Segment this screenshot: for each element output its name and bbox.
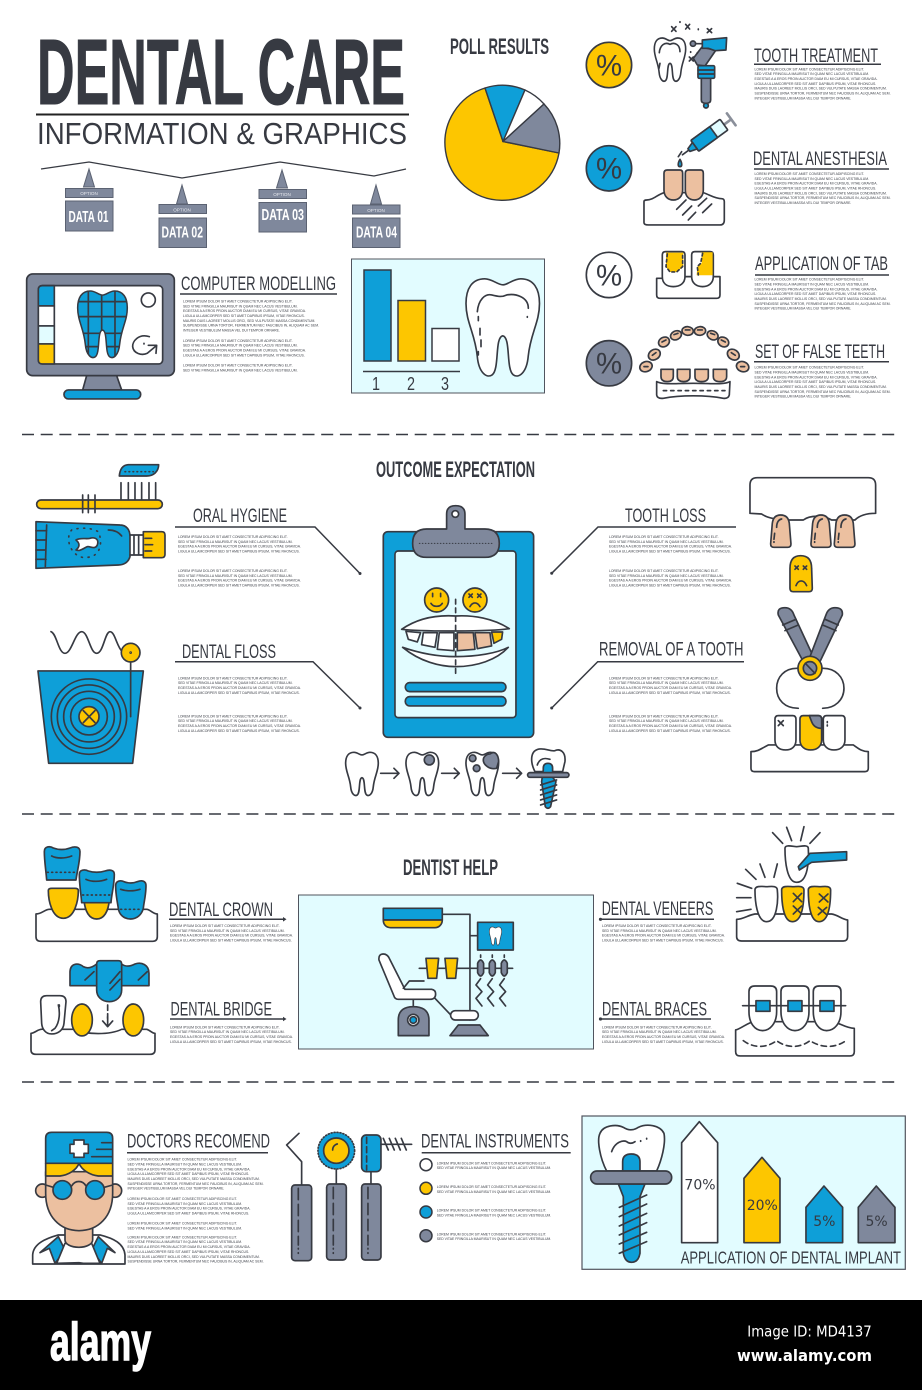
text block: oral hygiene: LIGULA ULLAMCORPER SED SIT AMET DAPIBUS IPSUM, VITAE RHONCUS. <box>178 549 300 554</box>
text block: dental veneers: LIGULA ULLAMCORPER SED SIT AMET DAPIBUS IPSUM, VITAE RHONCUS. <box>602 938 724 943</box>
data tag 01: DATA 01 <box>68 209 109 226</box>
text block: dental floss: LOREM IPSUM DOLOR SIT AMET CONSECTETUR ADIPISCING ELIT. <box>178 714 288 718</box>
title: DENTAL CARE <box>37 20 405 124</box>
text block: doctors recomend: EGESTAS A A EROS PROIN AUCTOR DIAM EU MI CURSUS, VITAE GRAVIDA. <box>128 1245 250 1249</box>
text block: dental crown: LOREM IPSUM DOLOR SIT AMET CONSECTETUR ADIPISCING ELIT. <box>170 924 280 928</box>
text block: computer modelling: LOREM IPSUM DOLOR SIT AMET CONSECTETUR ADIPISCING ELIT. <box>183 299 293 304</box>
subtitle: INFORMATION & GRAPHICS <box>37 116 407 151</box>
data tag 04: OPTION <box>367 208 385 213</box>
bullet list: dental instruments: LOREM IPSUM DOLOR SIT AMET CONSECTETUR ADIPISCING ELIT. <box>437 1208 546 1213</box>
heading: dental crown <box>169 899 293 943</box>
text block: set of false teeth: INTEGER VESTIBULUM MASSA VEL DUI TEMPOR ORNARE. <box>754 395 851 399</box>
text block: computer modelling <box>183 299 319 372</box>
heading: set of false teeth <box>754 341 891 399</box>
panel: dentist chair and equipment <box>298 895 594 1049</box>
text block: removal of a tooth: SED VITAE FRINGILLA MAURISUT IN QUAM NEC LACUS VESTIBULUM. <box>609 681 724 685</box>
heading: dental veneers: DENTAL VENEERS <box>602 898 713 920</box>
icon: set of false teeth <box>638 326 750 398</box>
text block: dental braces: LIGULA ULLAMCORPER SED SIT AMET DAPIBUS IPSUM, VITAE RHONCUS. <box>602 1040 724 1044</box>
icon: dental braces <box>736 986 854 1056</box>
pie chart <box>445 85 560 200</box>
bullet list: dental instruments: SED VITAE FRINGILLA MAURISUT IN QUAM NEC LACUS VESTIBULUM. <box>437 1190 551 1194</box>
text block: application of tab: EGESTAS A A EROS PROIN AUCTOR DIAM EU MI CURSUS, VITAE GRAVIDA. <box>754 287 877 291</box>
text block: application of tab: LIGULA ULLAMCORPER SED SIT AMET DAPIBUS IPSUM, VITAE RHONCUS. <box>754 292 876 296</box>
bar: 70 percent: 70% <box>684 1177 716 1193</box>
bullet list: dental instruments: SED VITAE FRINGILLA MAURISUT IN QUAM NEC LACUS VESTIBULUM. <box>437 1237 551 1241</box>
text block: doctors recomend: SED VITAE FRINGILLA MAURISUT IN QUAM NEC LACUS VESTIBULUM. <box>128 1226 242 1231</box>
heading: poll results: POLL RESULTS <box>450 34 549 59</box>
text block: dental crown: SED VITAE FRINGILLA MAURISUT IN QUAM NEC LACUS VESTIBULUM. <box>170 929 285 933</box>
icon: anesthesia syringe and teeth <box>644 113 736 225</box>
bar chart: 1 <box>372 373 380 394</box>
data timeline <box>41 162 406 248</box>
text block: computer modelling: INTEGER VESTIBULUM MASSA VEL DUI TEMPOR ORNARE. <box>183 328 280 333</box>
text block: dental veneers: LOREM IPSUM DOLOR SIT AMET CONSECTETUR ADIPISCING ELIT. <box>602 924 712 928</box>
percent circle badges: % <box>596 348 622 381</box>
text block: doctors recomend: MAURIS DUIS LAOREET MOLLIS ORCI, SED VULPUTATE MASSA CONDIMENTUM. <box>128 1177 260 1181</box>
heading: dentist help: DENTIST HELP <box>403 855 498 880</box>
heading: removal of a tooth: REMOVAL OF A TOOTH <box>599 639 744 661</box>
text block: removal of a tooth: LIGULA ULLAMCORPER SED SIT AMET DAPIBUS IPSUM, VITAE RHONCUS. <box>609 729 731 733</box>
text block: oral hygiene: EGESTAS A A EROS PROIN AUCTOR DIAM EU MI CURSUS, VITAE GRAVIDA. <box>178 545 301 549</box>
text block: tooth loss: LIGULA ULLAMCORPER SED SIT AMET DAPIBUS IPSUM, VITAE RHONCUS. <box>609 549 731 554</box>
text block: dental anesthesia: EGESTAS A A EROS PROIN AUCTOR DIAM EU MI CURSUS, VITAE GRAVIDA. <box>754 182 877 186</box>
text block: set of false teeth: MAURIS DUIS LAOREET MOLLIS ORCI, SED VULPUTATE MASSA CONDIMENTUM. <box>754 385 887 389</box>
panel: application of dental implant <box>582 1116 905 1269</box>
text block: removal of a tooth: LIGULA ULLAMCORPER SED SIT AMET DAPIBUS IPSUM, VITAE RHONCUS. <box>609 691 731 695</box>
text block: dental floss: SED VITAE FRINGILLA MAURISUT IN QUAM NEC LACUS VESTIBULUM. <box>178 719 293 723</box>
text block: dental floss: LIGULA ULLAMCORPER SED SIT AMET DAPIBUS IPSUM, VITAE RHONCUS. <box>178 729 300 733</box>
text block: set of false teeth: LIGULA ULLAMCORPER SED SIT AMET DAPIBUS IPSUM, VITAE RHONCUS. <box>754 380 876 384</box>
text block: computer modelling: SED VITAE FRINGILLA MAURISUT IN QUAM NEC LACUS VESTIBULUM. <box>183 304 298 308</box>
text block: dental floss: EGESTAS A A EROS PROIN AUCTOR DIAM EU MI CURSUS, VITAE GRAVIDA. <box>178 686 301 690</box>
text block: removal of a tooth: LOREM IPSUM DOLOR SIT AMET CONSECTETUR ADIPISCING ELIT. <box>609 714 719 718</box>
heading: oral hygiene: ORAL HYGIENE <box>193 505 287 527</box>
text block: oral hygiene: SED VITAE FRINGILLA MAURISUT IN QUAM NEC LACUS VESTIBULUM. <box>178 574 293 578</box>
text block: doctors recomend: INTEGER VESTIBULUM MASSA VEL DUI TEMPOR ORNARE. <box>128 1187 224 1191</box>
text block: tooth loss: EGESTAS A A EROS PROIN AUCTOR DIAM EU MI CURSUS, VITAE GRAVIDA. <box>609 545 732 549</box>
bar: 5 percent grey <box>858 1186 895 1243</box>
text block: doctors recomend: MAURIS DUIS LAOREET MOLLIS ORCI, SED VULPUTATE MASSA CONDIMENTUM. <box>128 1255 260 1259</box>
text block: doctors recomend: LIGULA ULLAMCORPER SED SIT AMET DAPIBUS IPSUM, VITAE RHONCUS. <box>128 1172 249 1176</box>
icon: computer monitor with tooth model <box>27 274 174 399</box>
text block: tooth treatment: LOREM IPSUM DOLOR SIT AMET CONSECTETUR ADIPISCING ELIT. <box>754 67 864 71</box>
text block: set of false teeth: LOREM IPSUM DOLOR SIT AMET CONSECTETUR ADIPISCING ELIT. <box>754 365 864 370</box>
text block: tooth treatment: SUSPENDISSE URNA TORTOR, FERMENTUM NEC FAUCIBUS IN, ALIQUAM AC SEM. <box>754 91 891 96</box>
icon: decayed tooth <box>466 752 499 795</box>
text block: dental bridge: LIGULA ULLAMCORPER SED SIT AMET DAPIBUS IPSUM, VITAE RHONCUS. <box>170 1040 292 1044</box>
bullet list: dental instruments: LOREM IPSUM DOLOR SIT AMET CONSECTETUR ADIPISCING ELIT. <box>437 1161 546 1165</box>
text block: set of false teeth: SED VITAE FRINGILLA MAURISUT IN QUAM NEC LACUS VESTIBULUM. <box>754 370 869 375</box>
text block: doctors recomend: LOREM IPSUM DOLOR SIT AMET CONSECTETUR ADIPISCING ELIT. <box>128 1235 237 1239</box>
heading: computer modelling <box>180 273 337 372</box>
text block: dental crown: EGESTAS A A EROS PROIN AUCTOR DIAM EU MI CURSUS, VITAE GRAVIDA. <box>170 934 293 938</box>
heading: dental veneers <box>599 898 725 943</box>
text block: oral hygiene: EGESTAS A A EROS PROIN AUCTOR DIAM EU MI CURSUS, VITAE GRAVIDA. <box>178 579 301 583</box>
text block: doctors recomend: LOREM IPSUM DOLOR SIT AMET CONSECTETUR ADIPISCING ELIT. <box>128 1197 237 1201</box>
icon: tooth loss <box>750 478 876 592</box>
text block: doctors recomend: LIGULA ULLAMCORPER SED SIT AMET DAPIBUS IPSUM, VITAE RHONCUS. <box>128 1211 249 1216</box>
text block: application of tab: SUSPENDISSE URNA TORTOR, FERMENTUM NEC FAUCIBUS IN, ALIQUAM AC SEM. <box>754 302 891 306</box>
text block: computer modelling: LOREM IPSUM DOLOR SIT AMET CONSECTETUR ADIPISCING ELIT. <box>183 339 293 343</box>
icon: implant <box>591 1125 672 1262</box>
text block: doctors recomend: SED VITAE FRINGILLA MAURISUT IN QUAM NEC LACUS VESTIBULUM. <box>128 1162 242 1167</box>
icon: tooth with cavity <box>406 752 439 795</box>
text block: dental floss: LIGULA ULLAMCORPER SED SIT AMET DAPIBUS IPSUM, VITAE RHONCUS. <box>178 691 300 695</box>
text block: dental crown: LIGULA ULLAMCORPER SED SIT AMET DAPIBUS IPSUM, VITAE RHONCUS. <box>170 938 292 943</box>
text block: dental bridge: SED VITAE FRINGILLA MAURISUT IN QUAM NEC LACUS VESTIBULUM. <box>170 1030 285 1034</box>
data tag 04: DATA 04 <box>356 224 397 242</box>
heading: dental bridge <box>170 999 293 1044</box>
icon: large tooth <box>466 279 539 376</box>
bar: 20 percent <box>744 1157 780 1243</box>
bullet list: dental instruments: LOREM IPSUM DOLOR SIT AMET CONSECTETUR ADIPISCING ELIT. <box>437 1185 546 1189</box>
arrow <box>503 768 522 778</box>
heading: dental braces: DENTAL BRACES <box>602 999 707 1021</box>
text block: dental anesthesia: SED VITAE FRINGILLA MAURISUT IN QUAM NEC LACUS VESTIBULUM. <box>754 177 869 181</box>
image id: Image ID: MD4137 <box>747 1322 872 1340</box>
heading: dental floss <box>175 641 362 733</box>
text block: application of tab: SED VITAE FRINGILLA MAURISUT IN QUAM NEC LACUS VESTIBULUM. <box>754 282 869 287</box>
heading: dental bridge: DENTAL BRIDGE <box>170 999 272 1021</box>
percent circle badges: % <box>596 259 622 292</box>
text block: dental braces: EGESTAS A A EROS PROIN AUCTOR DIAM EU MI CURSUS, VITAE GRAVIDA. <box>602 1035 725 1039</box>
text block: tooth treatment: SED VITAE FRINGILLA MAURISUT IN QUAM NEC LACUS VESTIBULUM. <box>754 72 869 76</box>
heading: dental crown: DENTAL CROWN <box>169 899 273 921</box>
data tag 02: DATA 02 <box>162 224 203 242</box>
text block: doctors recomend: LOREM IPSUM DOLOR SIT AMET CONSECTETUR ADIPISCING ELIT. <box>128 1221 237 1226</box>
text block: removal of a tooth: LOREM IPSUM DOLOR SIT AMET CONSECTETUR ADIPISCING ELIT. <box>609 676 719 680</box>
text block: computer modelling: SED VITAE FRINGILLA MAURISUT IN QUAM NEC LACUS VESTIBULUM. <box>183 368 298 372</box>
heading: application of tab <box>754 253 891 311</box>
text block: dental anesthesia: LIGULA ULLAMCORPER SED SIT AMET DAPIBUS IPSUM, VITAE RHONCUS. <box>754 186 876 191</box>
clipboard with smile comparison <box>383 506 534 737</box>
text block: tooth loss: LOREM IPSUM DOLOR SIT AMET CONSECTETUR ADIPISCING ELIT. <box>609 535 719 539</box>
icon: doctor <box>33 1132 125 1264</box>
text block: doctors recomend: EGESTAS A A EROS PROIN AUCTOR DIAM EU MI CURSUS, VITAE GRAVIDA. <box>128 1167 250 1171</box>
heading: tooth loss: TOOTH LOSS <box>625 505 706 527</box>
heading: doctors recomend <box>127 1131 270 1264</box>
text block: oral hygiene: LOREM IPSUM DOLOR SIT AMET CONSECTETUR ADIPISCING ELIT. <box>178 535 288 539</box>
text block: application of tab: LOREM IPSUM DOLOR SIT AMET CONSECTETUR ADIPISCING ELIT. <box>754 277 864 282</box>
arrow <box>381 768 399 778</box>
text block: doctors recomend: SED VITAE FRINGILLA MAURISUT IN QUAM NEC LACUS VESTIBULUM. <box>128 1240 242 1244</box>
heading: dental instruments: DENTAL INSTRUMENTS <box>421 1131 569 1153</box>
bar chart: 2 <box>407 373 415 394</box>
text block: dental anesthesia: INTEGER VESTIBULUM MASSA VEL DUI TEMPOR ORNARE. <box>754 201 851 205</box>
bar: 5 percent blue <box>806 1186 843 1243</box>
bar: 5 percent grey: 5% <box>866 1214 888 1230</box>
icon: dental veneers <box>737 827 848 941</box>
text block: computer modelling: EGESTAS A A EROS PROIN AUCTOR DIAM EU MI CURSUS, VITAE GRAVIDA. <box>183 309 306 313</box>
text block: removal of a tooth: EGESTAS A A EROS PROIN AUCTOR DIAM EU MI CURSUS, VITAE GRAVIDA. <box>609 686 732 690</box>
text block: oral hygiene: LIGULA ULLAMCORPER SED SIT AMET DAPIBUS IPSUM, VITAE RHONCUS. <box>178 583 300 588</box>
text block: dental veneers: SED VITAE FRINGILLA MAURISUT IN QUAM NEC LACUS VESTIBULUM. <box>602 929 717 933</box>
text block: tooth loss: SED VITAE FRINGILLA MAURISUT IN QUAM NEC LACUS VESTIBULUM. <box>609 540 724 544</box>
bar chart panel with tooth <box>352 259 544 394</box>
text block: dental braces: LOREM IPSUM DOLOR SIT AMET CONSECTETUR ADIPISCING ELIT. <box>602 1025 712 1029</box>
percent circle badges: % <box>596 153 622 186</box>
text block: tooth loss: LIGULA ULLAMCORPER SED SIT AMET DAPIBUS IPSUM, VITAE RHONCUS. <box>609 583 731 588</box>
icon: dental floss box <box>38 632 143 763</box>
tooth decay progression <box>346 749 569 808</box>
text block: computer modelling: EGESTAS A A EROS PROIN AUCTOR DIAM EU MI CURSUS, VITAE GRAVIDA. <box>183 348 306 353</box>
bullet list: dental instruments <box>420 1159 551 1242</box>
bullet list: dental instruments: SED VITAE FRINGILLA MAURISUT IN QUAM NEC LACUS VESTIBULUM. <box>437 1213 551 1218</box>
icon: tooth removal pliers <box>751 608 868 772</box>
text block: removal of a tooth: SED VITAE FRINGILLA MAURISUT IN QUAM NEC LACUS VESTIBULUM. <box>609 719 724 723</box>
text block: tooth loss: EGESTAS A A EROS PROIN AUCTOR DIAM EU MI CURSUS, VITAE GRAVIDA. <box>609 579 732 583</box>
data tag 01 <box>66 169 113 231</box>
text block: dental braces: SED VITAE FRINGILLA MAURISUT IN QUAM NEC LACUS VESTIBULUM. <box>602 1030 717 1034</box>
icon: application of tab <box>657 252 720 298</box>
text block: doctors recomend: LOREM IPSUM DOLOR SIT AMET CONSECTETUR ADIPISCING ELIT. <box>128 1157 237 1162</box>
text block: dental anesthesia: MAURIS DUIS LAOREET MOLLIS ORCI, SED VULPUTATE MASSA CONDIMENTUM. <box>754 191 887 195</box>
bullet list: dental instruments: LOREM IPSUM DOLOR SIT AMET CONSECTETUR ADIPISCING ELIT. <box>437 1232 546 1236</box>
heading: tooth treatment <box>754 45 891 100</box>
text block: dental anesthesia: LOREM IPSUM DOLOR SIT AMET CONSECTETUR ADIPISCING ELIT. <box>754 172 864 176</box>
text block: tooth treatment: LIGULA ULLAMCORPER SED SIT AMET DAPIBUS IPSUM, VITAE RHONCUS. <box>754 82 876 86</box>
heading: dental anesthesia <box>753 148 891 205</box>
icon: dental instruments <box>287 1132 412 1261</box>
text block: computer modelling: LOREM IPSUM DOLOR SIT AMET CONSECTETUR ADIPISCING ELIT. <box>183 363 293 368</box>
text block: computer modelling: MAURIS DUIS LAOREET MOLLIS ORCI, SED VULPUTATE MASSA CONDIMENTUM. <box>183 319 315 323</box>
text block: doctors recomend: EGESTAS A A EROS PROIN AUCTOR DIAM EU MI CURSUS, VITAE GRAVIDA. <box>128 1207 250 1211</box>
heading: tooth loss <box>550 505 736 588</box>
data tag 01: OPTION <box>80 191 98 196</box>
text block: computer modelling: LIGULA ULLAMCORPER SED SIT AMET DAPIBUS IPSUM, VITAE RHONCUS. <box>183 314 305 318</box>
heading: removal of a tooth <box>550 639 744 733</box>
heading: computer modelling: COMPUTER MODELLING <box>181 273 336 295</box>
text block: computer modelling: SED VITAE FRINGILLA MAURISUT IN QUAM NEC LACUS VESTIBULUM. <box>183 343 298 348</box>
text block: tooth loss: LOREM IPSUM DOLOR SIT AMET CONSECTETUR ADIPISCING ELIT. <box>609 569 719 573</box>
text block: computer modelling: SUSPENDISSE URNA TORTOR, FERMENTUM NEC FAUCIBUS IN, ALIQUAM AC SEM. <box>183 324 319 328</box>
text block: doctors recomend: SUSPENDISSE URNA TORTOR, FERMENTUM NEC FAUCIBUS IN, ALIQUAM AC SEM. <box>128 1259 264 1264</box>
bar chart: 3 <box>441 373 449 394</box>
bar: 20 percent: 20% <box>747 1198 778 1214</box>
text block: dental veneers: EGESTAS A A EROS PROIN AUCTOR DIAM EU MI CURSUS, VITAE GRAVIDA. <box>602 934 725 938</box>
text block: doctors recomend: SUSPENDISSE URNA TORTOR, FERMENTUM NEC FAUCIBUS IN, ALIQUAM AC SEM. <box>128 1182 264 1186</box>
data tag 02: OPTION <box>173 208 191 212</box>
text block: doctors recomend: SED VITAE FRINGILLA MAURISUT IN QUAM NEC LACUS VESTIBULUM. <box>128 1202 242 1206</box>
text block: dental floss: EGESTAS A A EROS PROIN AUCTOR DIAM EU MI CURSUS, VITAE GRAVIDA. <box>178 724 301 728</box>
heading: doctors recomend: DOCTORS RECOMEND <box>127 1131 270 1153</box>
text block: tooth treatment: INTEGER VESTIBULUM MASSA VEL DUI TEMPOR ORNARE. <box>754 96 851 100</box>
data tag 02 <box>159 185 206 248</box>
data tag 03: DATA 03 <box>262 207 304 224</box>
text block: oral hygiene: SED VITAE FRINGILLA MAURISUT IN QUAM NEC LACUS VESTIBULUM. <box>178 540 293 544</box>
icon: dentist chair <box>379 908 513 1036</box>
heading: dental instruments <box>420 1131 571 1242</box>
text block: dental floss: LOREM IPSUM DOLOR SIT AMET CONSECTETUR ADIPISCING ELIT. <box>178 676 288 680</box>
footer logo: alamy <box>50 1313 151 1372</box>
bar: 5 percent blue: 5% <box>813 1214 835 1230</box>
text block: dental floss: SED VITAE FRINGILLA MAURISUT IN QUAM NEC LACUS VESTIBULUM. <box>178 681 293 685</box>
data tag 03 <box>259 170 306 232</box>
icon: dental crown <box>36 847 157 941</box>
text block: tooth treatment: EGESTAS A A EROS PROIN AUCTOR DIAM EU MI CURSUS, VITAE GRAVIDA. <box>754 77 877 81</box>
footer bar <box>0 1300 922 1390</box>
text block: removal of a tooth: EGESTAS A A EROS PROIN AUCTOR DIAM EU MI CURSUS, VITAE GRAVIDA. <box>609 724 732 728</box>
text block: set of false teeth: EGESTAS A A EROS PROIN AUCTOR DIAM EU MI CURSUS, VITAE GRAVIDA. <box>754 375 877 379</box>
text block: computer modelling: LIGULA ULLAMCORPER SED SIT AMET DAPIBUS IPSUM, VITAE RHONCUS. <box>183 353 305 357</box>
bar: 70 percent <box>682 1122 718 1243</box>
text block: tooth treatment: MAURIS DUIS LAOREET MOLLIS ORCI, SED VULPUTATE MASSA CONDIMENTUM. <box>754 87 887 91</box>
text block: application of tab: INTEGER VESTIBULUM MASSA VEL DUI TEMPOR ORNARE. <box>754 307 851 311</box>
bar chart <box>363 270 460 394</box>
text block: dental bridge: EGESTAS A A EROS PROIN AUCTOR DIAM EU MI CURSUS, VITAE GRAVIDA. <box>170 1035 293 1039</box>
data tag 04 <box>352 185 400 248</box>
heading: outcome expectation: OUTCOME EXPECTATION <box>376 457 535 482</box>
text block: tooth loss: SED VITAE FRINGILLA MAURISUT IN QUAM NEC LACUS VESTIBULUM. <box>609 574 724 578</box>
icon: tooth treatment drill <box>654 22 727 108</box>
arrow <box>442 768 459 778</box>
heading: dental braces <box>599 999 725 1044</box>
bullet list: dental instruments: SED VITAE FRINGILLA MAURISUT IN QUAM NEC LACUS VESTIBULUM. <box>437 1166 551 1170</box>
text block: dental bridge: LOREM IPSUM DOLOR SIT AMET CONSECTETUR ADIPISCING ELIT. <box>170 1025 280 1029</box>
text block: dental anesthesia: SUSPENDISSE URNA TORTOR, FERMENTUM NEC FAUCIBUS IN, ALIQUAM AC SEM. <box>754 196 891 200</box>
icon: dental bridge <box>31 961 155 1054</box>
text block: set of false teeth: SUSPENDISSE URNA TORTOR, FERMENTUM NEC FAUCIBUS IN, ALIQUAM AC SEM. <box>754 390 891 394</box>
heading: dental floss: DENTAL FLOSS <box>182 641 276 663</box>
icon: dental implant <box>528 749 569 808</box>
data tag 03: OPTION <box>273 192 291 197</box>
percent circle badges: % <box>596 49 622 82</box>
text block: doctors recomend: LIGULA ULLAMCORPER SED SIT AMET DAPIBUS IPSUM, VITAE RHONCUS. <box>128 1250 249 1254</box>
website: www.alamy.com <box>737 1346 872 1365</box>
icon: healthy tooth <box>346 752 378 795</box>
percent circle badges <box>586 42 632 386</box>
heading: oral hygiene <box>175 505 362 588</box>
icon: toothbrush and paste <box>36 465 165 568</box>
text block: application of tab: MAURIS DUIS LAOREET MOLLIS ORCI, SED VULPUTATE MASSA CONDIMENTUM. <box>754 297 887 301</box>
text block: oral hygiene: LOREM IPSUM DOLOR SIT AMET CONSECTETUR ADIPISCING ELIT. <box>178 569 288 573</box>
